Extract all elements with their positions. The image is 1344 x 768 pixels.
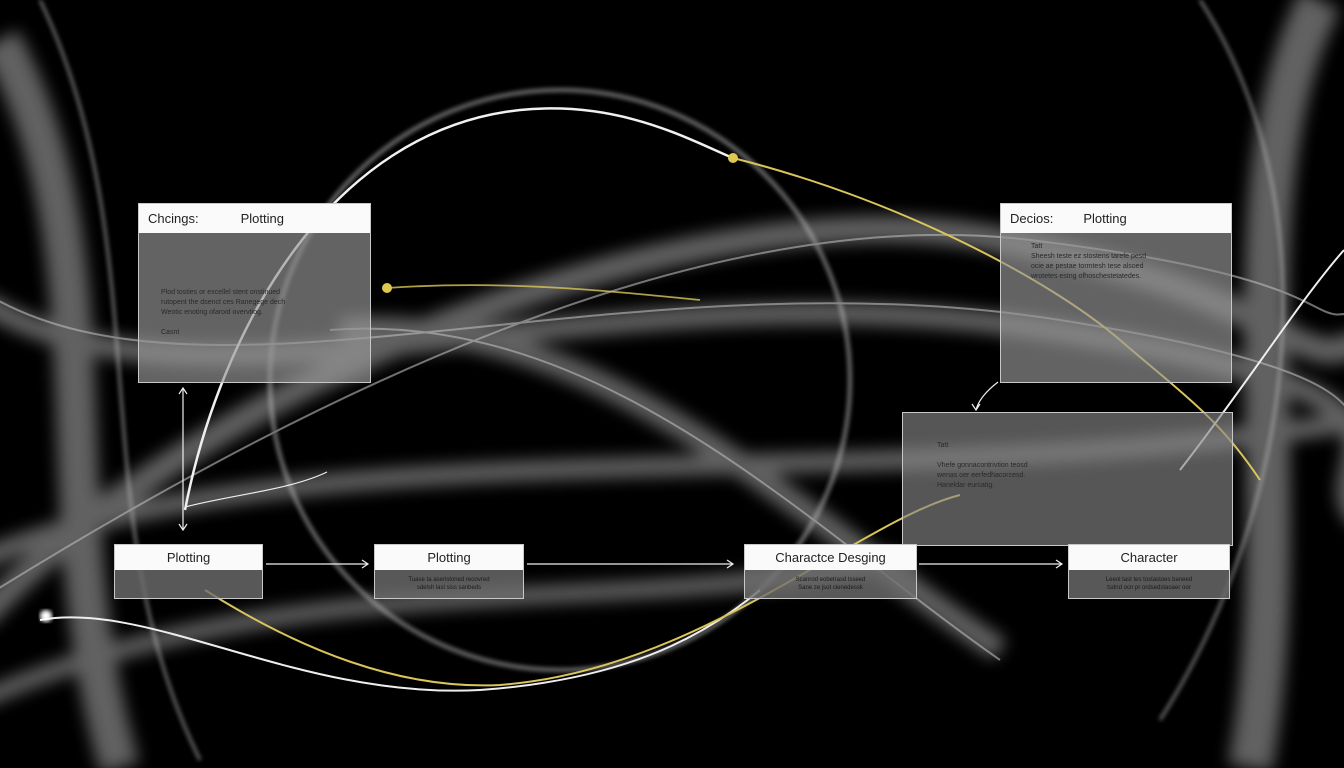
line: white arc top [185, 108, 733, 510]
box: Plotting 2: Plotting [427, 550, 471, 565]
line: yellow mid [387, 285, 700, 300]
line: yellow bottom [205, 495, 960, 685]
text block: wenas oer eerfedhacorcesd. [937, 472, 1025, 479]
text block [1031, 243, 1146, 280]
box: Character [1068, 544, 1230, 599]
box: Plotting 1 [114, 544, 263, 599]
arrows [179, 382, 1062, 568]
heading: Chcings: Plotting [148, 211, 284, 226]
box: Character: Leeol tast tes tostastoes baneed [1106, 577, 1192, 583]
box: Charactce Desging [744, 544, 917, 599]
text block: Vhefe gonnacontrivtion teosd [937, 462, 1028, 469]
heading: Decios: Plotting [1010, 211, 1127, 226]
heading [1001, 204, 1231, 233]
text block: rutopent the dsenct ces Ranegege dech [161, 299, 285, 306]
text block: Tatt [1031, 243, 1042, 250]
text block: Plod tosties or excellel stent onstinued [161, 289, 280, 296]
box: Plotting 2 [374, 544, 524, 599]
text block: Tatt [937, 442, 948, 449]
text block: Casnt [161, 329, 179, 336]
text block [937, 442, 1028, 489]
text block: Weotic enoting ofaroid overvtiog. [161, 309, 263, 316]
text block: Sheesh teste ez stostens tarefe pesd [1031, 253, 1146, 260]
line: yellow top [733, 158, 1260, 480]
text block: wrotetes estng ofhoschestetatedes. [1031, 273, 1141, 280]
box: Plotting 2: Tuase ta aseristoned reoovred [408, 577, 490, 583]
box: Plotting 1: Plotting [167, 550, 210, 565]
panel: top-left [138, 203, 371, 383]
text block: ocie ae pestae tormtesh tese alsoed [1031, 263, 1143, 270]
text block [161, 288, 285, 336]
box: Charactce Desging: Scanrod eobetrasd lsseed [796, 577, 865, 583]
box: Character: tsdnd ocn pr ordsedstaoaer oor [1107, 585, 1191, 591]
text block: Haneldar eurcatig. [937, 482, 994, 489]
box: Plotting 2: sdelsh lasl siss sanbeds [417, 585, 481, 591]
box: Charactce Desging: Sane ze jsot cienedessk [798, 585, 863, 591]
panel: right middle [902, 412, 1233, 546]
panel: top-right [1000, 203, 1232, 383]
heading [139, 204, 370, 233]
line: white bottom arc [40, 590, 760, 691]
box: Charactce Desging: Charactce Desging [775, 550, 886, 565]
box: Character: Character [1120, 550, 1178, 565]
